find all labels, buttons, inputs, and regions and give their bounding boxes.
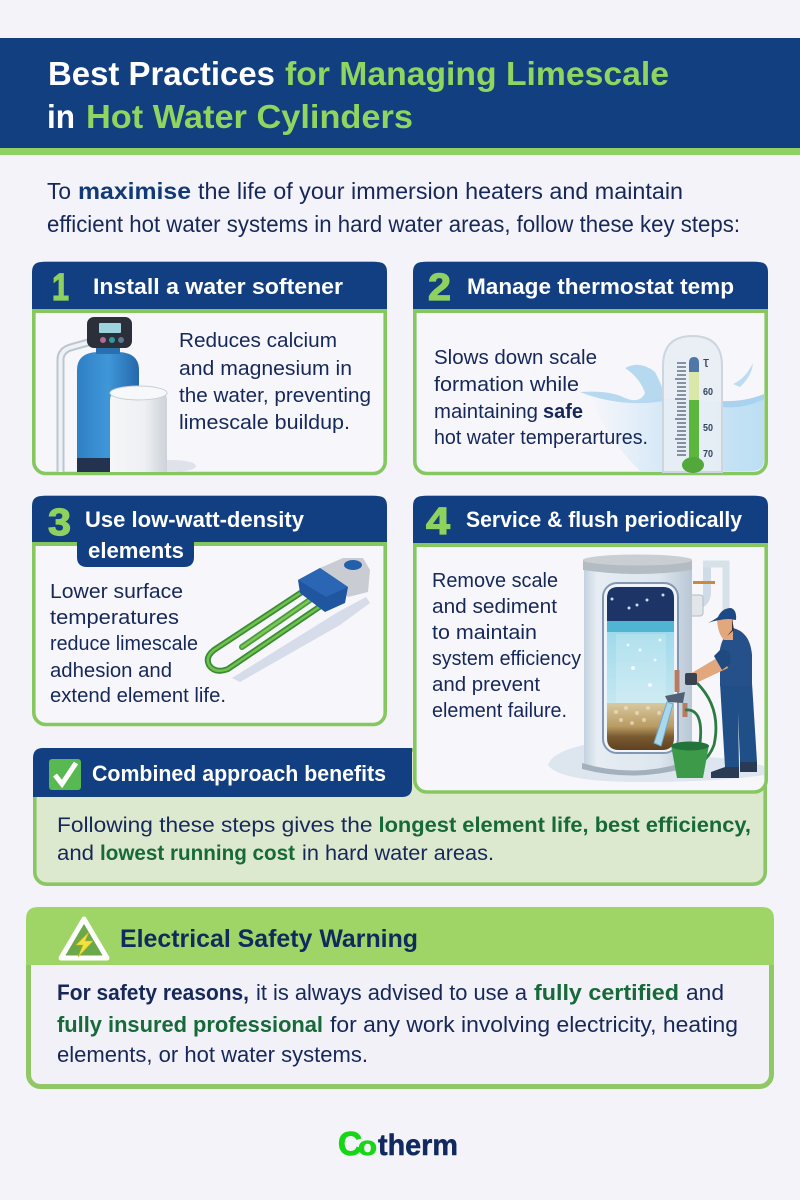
title xyxy=(47,55,669,135)
step 1 text: and magnesium in xyxy=(179,358,352,380)
intro text xyxy=(47,178,740,237)
warning text: and xyxy=(686,980,724,1005)
combined text: and xyxy=(57,842,94,865)
title: Hot Water Cylinders xyxy=(86,98,413,135)
step 2 text: maintaining xyxy=(434,401,538,423)
step 3 text: extend element life. xyxy=(50,685,226,707)
step 3 text: temperatures xyxy=(50,607,179,629)
step 4 text: system efficiency xyxy=(432,648,581,670)
step 1 heading: Install a water softener xyxy=(93,274,343,299)
step 4 text xyxy=(432,570,581,722)
step 2 number: 2 xyxy=(428,267,451,309)
step 3 text xyxy=(50,581,226,707)
title: in xyxy=(47,98,75,135)
step 3 text: adhesion and xyxy=(50,660,172,682)
warning text: it is always advised to use a xyxy=(256,980,528,1005)
water illustration xyxy=(580,363,764,471)
step 4 text: and prevent xyxy=(432,674,540,696)
step 2 text: formation while xyxy=(434,374,579,396)
warning text: For safety reasons, xyxy=(57,980,249,1005)
icon: thermometer: τ xyxy=(703,354,709,371)
step 1 text: limescale buildup. xyxy=(179,412,350,434)
pipework xyxy=(680,564,726,616)
step 2 text: safe xyxy=(543,401,583,423)
intro text: To xyxy=(47,178,71,204)
icon: thermometer: 70 xyxy=(703,449,713,460)
warning text: fully certified xyxy=(534,980,679,1005)
step 3 heading xyxy=(85,507,304,563)
icon: thermometer: 60 xyxy=(703,387,713,398)
logo: Cotherm: C xyxy=(338,1125,362,1162)
step 1 text: Reduces calcium xyxy=(179,330,337,352)
warning heading: Electrical Safety Warning xyxy=(120,925,418,953)
logo: Cotherm xyxy=(338,1125,458,1162)
technician xyxy=(685,608,757,778)
icon: check mark xyxy=(49,759,81,790)
step 3 text: Lower surface xyxy=(50,581,183,603)
combined text: Following these steps gives the xyxy=(57,814,372,837)
step 4 text: to maintain xyxy=(432,622,537,644)
step 1 number: 1 xyxy=(52,267,69,309)
bucket xyxy=(671,742,709,778)
icon: immersion heating element xyxy=(208,558,370,682)
intro text: efficient hot water systems in hard water areas, follow these key steps: xyxy=(47,211,740,237)
warning text: for any work involving electricity, heating xyxy=(330,1012,738,1037)
combined text: lowest running cost xyxy=(100,842,295,865)
title: for Managing Limescale xyxy=(285,55,669,92)
warning text: elements, or hot water systems. xyxy=(57,1042,368,1067)
step 2 text xyxy=(434,347,648,449)
logo: Cotherm: therm xyxy=(378,1129,458,1162)
step 3 text: reduce limescale xyxy=(50,633,198,655)
logo: Cotherm: o xyxy=(358,1131,377,1161)
title banner xyxy=(0,38,800,155)
panel: electrical safety warning xyxy=(26,907,774,1086)
combined text: in hard water areas. xyxy=(302,842,494,865)
title: Best Practices xyxy=(48,55,275,92)
combined heading: Combined approach benefits xyxy=(92,761,386,786)
panel: step 2 thermostat xyxy=(413,262,768,474)
step 4 number: 4 xyxy=(426,501,450,543)
step 4 text: Remove scale xyxy=(432,570,558,592)
intro text: maximise xyxy=(78,178,191,204)
cylinder xyxy=(582,554,692,776)
panel: combined approach benefits xyxy=(33,748,765,884)
panel: step 1 water softener xyxy=(32,262,387,474)
warning text: fully insured professional xyxy=(57,1012,323,1037)
icon: water softener xyxy=(60,317,196,472)
drain valve and tube xyxy=(654,670,685,746)
step 3 heading: Use low-watt-density xyxy=(85,507,304,532)
intro text: the life of your immersion heaters and maintain xyxy=(198,178,683,204)
step 1 text: the water, preventing xyxy=(179,385,371,407)
step 4 text: and sediment xyxy=(432,596,557,618)
step 2 text: Slows down scale xyxy=(434,347,597,369)
step 3 number: 3 xyxy=(48,502,71,544)
panel: step 3 low-watt-density elements xyxy=(32,496,387,724)
warning text xyxy=(57,980,738,1067)
combined text: longest element life, best efficiency, xyxy=(378,814,751,837)
step 4 heading: Service & flush periodically xyxy=(466,507,742,532)
combined text xyxy=(57,814,751,865)
step 4 text: element failure. xyxy=(432,700,567,722)
step 3 heading: elements xyxy=(88,538,184,563)
step 2 heading: Manage thermostat temp xyxy=(467,274,734,299)
illustration: technician flushing cylinder xyxy=(548,554,764,782)
panel: step 4 service and flush xyxy=(413,496,768,792)
step 2 text: hot water temperartures. xyxy=(434,427,648,449)
icon: thermometer: 50 xyxy=(703,423,713,434)
step 1 text xyxy=(179,330,371,434)
hose xyxy=(675,683,716,767)
icon: warning triangle xyxy=(61,919,107,958)
icon: thermometer xyxy=(663,336,722,473)
